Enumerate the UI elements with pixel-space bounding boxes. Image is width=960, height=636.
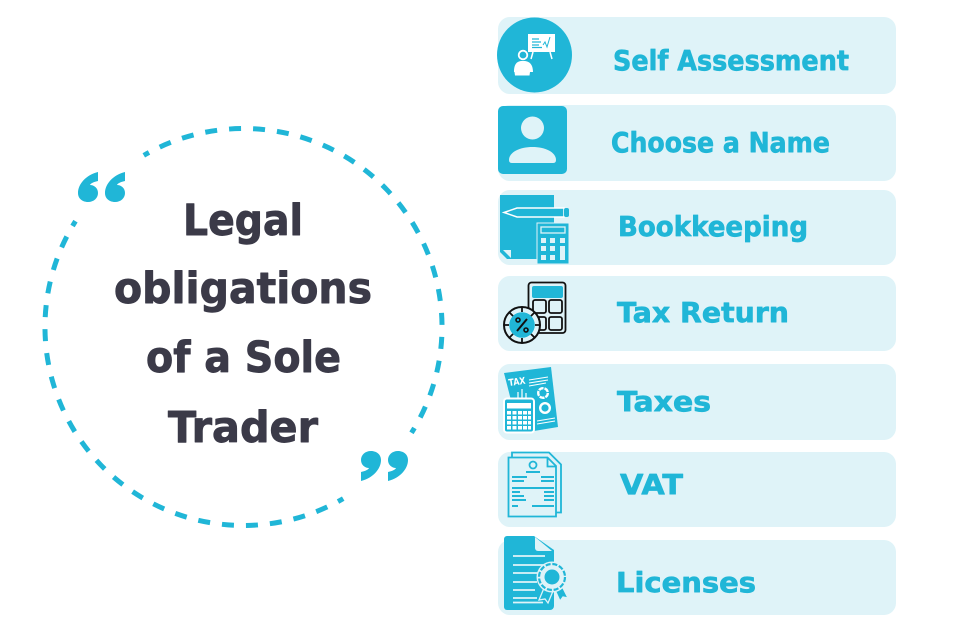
row: Licenses — [498, 536, 896, 615]
icon: profile — [498, 106, 567, 174]
title: Legal — [183, 196, 303, 246]
label: Licenses — [616, 566, 756, 599]
row: Choose a Name — [498, 105, 896, 181]
icon: presenter at board — [497, 18, 572, 92]
icon: certificate document — [504, 536, 568, 610]
closing quote mark — [361, 451, 408, 481]
icon: stacked documents — [508, 452, 561, 516]
label: Taxes — [617, 385, 711, 418]
icon: note, pencil, calculator — [500, 195, 569, 264]
label: VAT — [620, 468, 683, 501]
row: Tax Return — [498, 276, 896, 351]
label: Tax Return — [617, 296, 789, 329]
icon: calculator with percent dial — [504, 282, 566, 343]
row: Taxes — [498, 364, 896, 440]
label: Choose a Name — [611, 126, 830, 159]
icon: tax form and calculator: TAX — [508, 376, 527, 389]
title: of a Sole — [146, 333, 341, 383]
icon: tax form and calculator — [504, 367, 558, 432]
row: Self Assessment — [497, 17, 896, 94]
title: obligations — [114, 264, 372, 314]
title: Trader — [168, 403, 319, 453]
label: Self Assessment — [613, 44, 849, 77]
row: VAT — [498, 452, 896, 527]
title — [114, 196, 372, 453]
row: Bookkeeping — [498, 190, 896, 265]
label: Bookkeeping — [618, 210, 808, 243]
dashed circle frame — [45, 129, 442, 525]
opening quote mark — [78, 172, 125, 202]
